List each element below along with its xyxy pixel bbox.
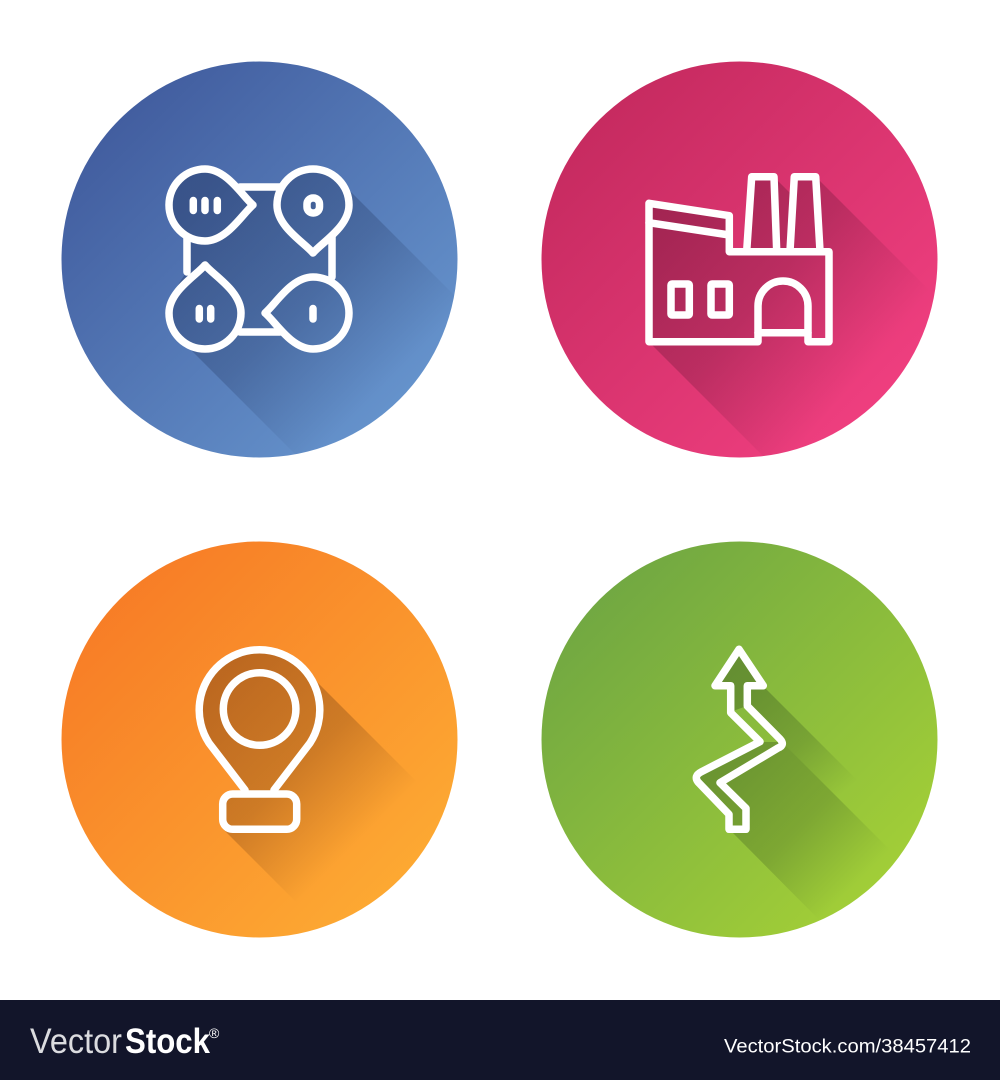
pink circle disc [542, 62, 938, 458]
icon: factory [649, 177, 829, 342]
icon: four location pins joined by a square [169, 169, 349, 349]
logo: VectorStock [30, 1022, 220, 1061]
long shadow of arrow head [722, 656, 844, 784]
icon: winding arrow pointing up [696, 649, 782, 829]
logo: VectorStock: Vector [30, 1022, 122, 1061]
logo: VectorStock: Stock [125, 1022, 210, 1061]
logo: VectorStock: ® [209, 1025, 220, 1041]
panel: pink circle with factory [542, 62, 938, 458]
green circle disc [542, 542, 938, 938]
long shadow of pins icon [172, 172, 440, 440]
panel: blue circle with connected location pins [62, 62, 478, 478]
panel: green circle with winding arrow [542, 542, 938, 950]
blue circle disc [62, 62, 458, 458]
long shadow of factory icon [652, 180, 910, 452]
orange circle disc [62, 542, 458, 938]
image id link text: VectorStock.com/38457412 [724, 1036, 971, 1058]
panel: orange circle with map pin [62, 542, 458, 968]
icon: map pin on base [199, 650, 320, 829]
footer bar [0, 1000, 1000, 1080]
long shadow of map pin icon [203, 654, 404, 890]
long shadow of arrow body [700, 742, 874, 904]
